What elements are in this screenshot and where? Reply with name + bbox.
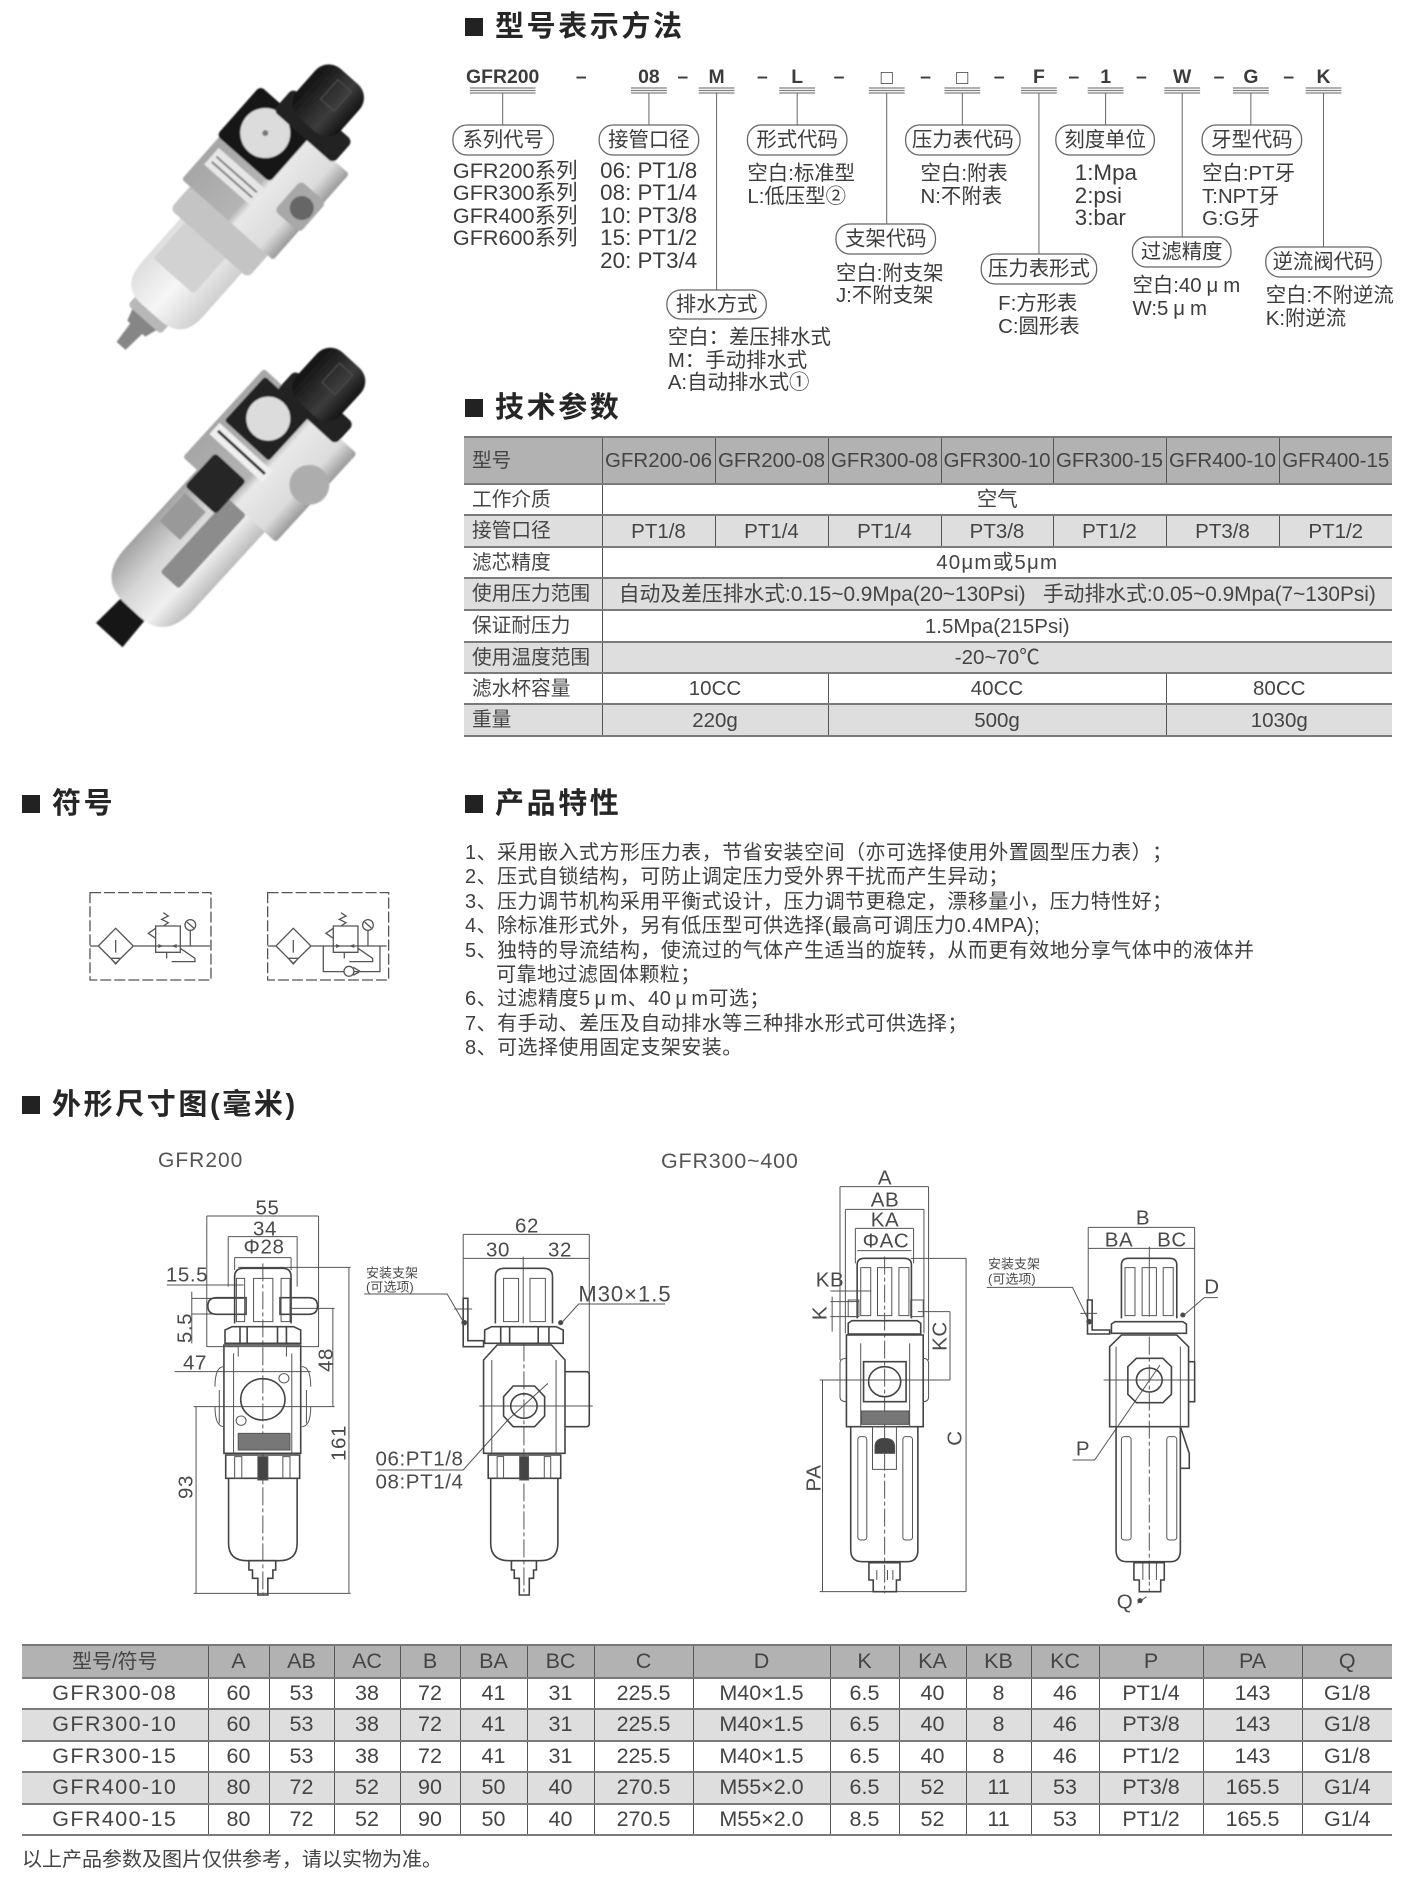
table: technical parameters: PT1/2 [1082, 520, 1137, 543]
dimension drawing: GFR300~400 front: KC [928, 1321, 952, 1351]
table: technical parameters: 1030g [1251, 709, 1308, 732]
table: dimensions: M40×1.5 [719, 1681, 804, 1705]
table: dimensions: AB [287, 1649, 316, 1673]
text block: product features: 2、压式自锁结构，可防止调定压力受外界干扰而产生异动； [465, 866, 1009, 888]
table: dimensions: 53 [1053, 1775, 1077, 1799]
table: dimensions: 53 [290, 1744, 313, 1768]
table: dimensions: 40 [921, 1744, 944, 1768]
dimension drawing: GFR200 side: 06:PT1/8 [376, 1448, 464, 1470]
table: dimensions: 6.5 [850, 1744, 879, 1768]
table: dimensions: P [1144, 1649, 1158, 1673]
item: port size: 15: PT1/2 [600, 225, 697, 250]
item: filtration [1132, 237, 1240, 320]
code letters: □ [956, 67, 968, 89]
table: technical parameters: GFR400-15 [1282, 449, 1389, 472]
table: dimensions: C [636, 1649, 651, 1673]
table: dimensions: 270.5 [617, 1775, 670, 1799]
code letters [466, 66, 1330, 89]
device 2 [61, 321, 405, 680]
code letters: GFR200 [466, 66, 540, 88]
heading: symbols: 符号 [52, 788, 115, 820]
item: form: L:低压型② [747, 185, 846, 208]
item: thread: G:G牙 [1202, 207, 1260, 230]
item: series [453, 125, 578, 250]
item: series: GFR600系列 [453, 225, 578, 250]
item: port size: 10: PT3/8 [600, 203, 697, 228]
item: scale unit: 1:Mpa [1075, 160, 1137, 185]
item: gauge form: C:圆形表 [998, 315, 1080, 338]
item: gauge code: N:不附表 [921, 185, 1002, 208]
code letters: G [1243, 66, 1258, 88]
table: dimensions: PT3/8 [1122, 1712, 1180, 1736]
table: dimensions: 165.5 [1226, 1807, 1279, 1831]
item: scale unit: 2:psi [1075, 183, 1122, 208]
heading: model code: 型号表示方法 [495, 11, 685, 43]
table: dimensions: 52 [921, 1807, 944, 1831]
table: dimensions: 53 [290, 1712, 313, 1736]
table: technical parameters: 使用温度范围 [472, 647, 590, 669]
table: dimensions: 50 [482, 1807, 505, 1831]
heading: symbols [22, 788, 115, 820]
item: filtration: 过滤精度 [1141, 240, 1222, 264]
heading: technical parameters: 技术参数 [495, 392, 621, 424]
dimension drawing: GFR300~400 front: A [878, 1166, 892, 1190]
table: dimensions: 52 [921, 1775, 944, 1799]
table: dimensions: M40×1.5 [719, 1744, 804, 1768]
table: dimensions: 40 [921, 1712, 944, 1736]
item: series: GFR300系列 [453, 180, 578, 205]
dimension drawing: GFR200 side: 32 [548, 1238, 572, 1262]
item: gauge form: F:方形表 [998, 292, 1077, 315]
dimension drawing: GFR200 side: 62 [515, 1214, 539, 1238]
table: dimensions: KA [918, 1649, 947, 1673]
dimension drawing: GFR200 side: M30×1.5 [578, 1282, 672, 1306]
table: technical parameters: 滤芯精度 [472, 552, 551, 574]
table: dimensions: 165.5 [1226, 1775, 1279, 1799]
item: filtration: W:5μm [1132, 297, 1207, 320]
text block: product features: 可靠地过滤固体颗粒； [496, 964, 701, 986]
table: dimensions: 46 [1053, 1681, 1077, 1705]
dimension drawing: GFR300~400 side: BA [1105, 1228, 1133, 1252]
item: form: 形式代码 [756, 128, 838, 152]
table: dimensions: 8.5 [850, 1807, 879, 1831]
code letters: – [1283, 66, 1294, 88]
table: technical parameters: PT1/8 [631, 520, 686, 543]
item: drain: M：手动排水式 [668, 349, 807, 372]
item: scale unit [1056, 125, 1154, 230]
table: dimensions: AC [352, 1649, 382, 1673]
product photo: two filter regulators [95, 63, 366, 648]
dimension drawing: GFR200 front: 5.5 [174, 1313, 196, 1343]
table: dimensions: 31 [549, 1712, 572, 1736]
table: dimensions: 270.5 [617, 1807, 670, 1831]
table: dimensions: 型号/符号 [72, 1650, 158, 1672]
item: form [747, 125, 855, 208]
code letters: F [1033, 66, 1045, 88]
code letters: – [920, 66, 931, 88]
code letters: – [576, 66, 587, 88]
table: dimensions: 80 [227, 1807, 250, 1831]
table: dimensions: GFR300-15 [52, 1744, 177, 1768]
table: dimensions: 40 [921, 1681, 944, 1705]
footnote: 以上产品参数及图片仅供参考，请以实物为准。 [22, 1849, 442, 1871]
table: technical parameters [464, 436, 1392, 737]
item: thread: T:NPT牙 [1202, 185, 1279, 208]
dimension drawing: GFR200 front: 55 [255, 1196, 280, 1220]
table: technical parameters: PT3/8 [1195, 520, 1250, 543]
table: dimensions: 72 [290, 1807, 313, 1831]
text block: product features: 1、采用嵌入式方形压力表，节省安装空间（亦可选择使用外置圆型压力表）； [465, 842, 1173, 864]
dimension drawing: GFR200 side: 30 [486, 1238, 510, 1262]
table: technical parameters: 40CC [971, 677, 1023, 700]
table: dimensions: PT1/2 [1122, 1744, 1180, 1768]
table: technical parameters: 220g [692, 709, 738, 732]
table: technical parameters: 重量 [472, 709, 511, 731]
table: dimensions: G1/4 [1324, 1775, 1371, 1799]
label: GFR200: GFR200 [158, 1149, 243, 1172]
table: dimensions: 41 [482, 1744, 505, 1768]
table: dimensions: 53 [1053, 1807, 1077, 1831]
table: dimensions: 80 [227, 1775, 250, 1799]
item: gauge form: 压力表形式 [988, 257, 1090, 281]
dimension drawing: GFR300~400 side [986, 1206, 1220, 1614]
table: dimensions: KB [984, 1649, 1013, 1673]
item: thread: 空白:PT牙 [1202, 162, 1295, 185]
dimension drawing: GFR300~400 side: P [1076, 1438, 1090, 1460]
table: dimensions: BC [546, 1649, 575, 1673]
dimension drawing: GFR300~400 front: KA [871, 1208, 899, 1232]
item: port size: 接管口径 [608, 128, 690, 152]
item: drain: A:自动排水式① [668, 371, 809, 394]
dimension drawing: GFR200 front: 34 [253, 1218, 277, 1240]
item: bracket: 空白:附支架 [836, 262, 944, 285]
dimension drawing: GFR200 side: 08:PT1/4 [376, 1470, 464, 1494]
item: gauge form [981, 254, 1097, 338]
code letters: – [757, 66, 768, 88]
heading: dimensions: 外形尺寸图(毫米) [52, 1089, 298, 1121]
code letters: 1 [1100, 66, 1111, 88]
item: series: GFR200系列 [453, 158, 578, 183]
item: check valve [1266, 247, 1394, 330]
table: dimensions: GFR400-15 [52, 1807, 177, 1831]
table: technical parameters: 40μm或5μm [936, 551, 1058, 574]
table: dimensions: PT3/8 [1122, 1775, 1180, 1799]
item: filtration: 空白:40μm [1132, 274, 1240, 297]
table: dimensions: 60 [227, 1712, 250, 1736]
table: dimensions: 40 [549, 1775, 572, 1799]
table: dimensions: 52 [355, 1807, 379, 1831]
code letters: – [1136, 66, 1147, 88]
code letters: K [1316, 66, 1330, 88]
table: technical parameters: 工作介质 [472, 489, 551, 511]
dimension drawing: GFR300~400 front [802, 1166, 967, 1594]
table: dimensions: 38 [355, 1744, 379, 1768]
table: dimensions: 72 [418, 1712, 442, 1736]
table: dimensions: 225.5 [617, 1681, 670, 1705]
table: dimensions: 225.5 [617, 1712, 670, 1736]
table: dimensions: G1/8 [1324, 1744, 1371, 1768]
dimension drawing: GFR200 front: Φ28 [244, 1236, 284, 1258]
dimension drawing: GFR200 front: 93 [174, 1475, 198, 1499]
code letters: – [1068, 66, 1079, 88]
code letters: W [1173, 66, 1192, 88]
item: series: 系列代号 [462, 128, 544, 152]
table: dimensions: 8 [993, 1712, 1004, 1736]
table: technical parameters: 自动及差压排水式:0.15~0.9Mpa(20~130Psi) 手动排水式:0.05~0.9Mpa(7~130Psi) [619, 583, 1376, 606]
table: dimensions: 38 [355, 1712, 379, 1736]
dimension drawing: GFR200 front: 161 [328, 1425, 350, 1461]
table: dimensions: B [423, 1649, 437, 1673]
heading: product features: 产品特性 [495, 788, 621, 820]
symbol: with check valve [268, 893, 389, 980]
table: dimensions: 52 [355, 1775, 379, 1799]
table: technical parameters: GFR200-08 [718, 449, 825, 472]
table: technical parameters: GFR300-08 [831, 449, 938, 472]
item: drain: 排水方式 [676, 293, 757, 316]
table: technical parameters: 1.5Mpa(215Psi) [925, 615, 1070, 638]
dimension drawing: GFR300~400 side: D [1204, 1276, 1220, 1298]
table: technical parameters: 型号 [472, 450, 511, 472]
dimension drawing: GFR200 side: 安装支架 [366, 1266, 418, 1280]
symbol diagrams [89, 892, 390, 981]
code letters: – [994, 66, 1005, 88]
table: technical parameters: GFR300-10 [943, 449, 1051, 472]
item: drain [667, 290, 831, 394]
item: thread: 牙型代码 [1211, 128, 1293, 152]
item: scale unit: 3:bar [1075, 205, 1126, 230]
dimension drawing: GFR300~400 front: K [808, 1306, 832, 1320]
table: technical parameters: PT1/4 [857, 520, 912, 543]
text block: product features: 7、有手动、差压及自动排水等三种排水形式可供选择； [465, 1013, 968, 1035]
dimension drawing: GFR300~400 side: Q [1117, 1590, 1133, 1614]
table: dimensions: M55×2.0 [719, 1775, 804, 1799]
table: dimensions: M55×2.0 [719, 1807, 804, 1831]
table: dimensions: Q [1339, 1649, 1356, 1673]
table: dimensions: D [754, 1649, 769, 1673]
item: bracket: J:不附支架 [836, 284, 933, 307]
table: dimensions: 11 [987, 1807, 1010, 1831]
table: technical parameters: PT1/2 [1308, 520, 1363, 543]
table: dimensions: M40×1.5 [719, 1712, 804, 1736]
table: dimensions: 90 [418, 1775, 442, 1799]
dimension drawing: GFR300~400 front: KB [816, 1268, 844, 1292]
table: dimensions: K [857, 1649, 872, 1673]
dimension drawing: GFR300~400 front: C [944, 1430, 966, 1446]
dimension drawing: GFR200 front: 47 [183, 1352, 207, 1374]
table: technical parameters: 500g [974, 709, 1020, 732]
table: dimensions: 72 [290, 1775, 313, 1799]
table: dimensions: 90 [418, 1807, 442, 1831]
table: technical parameters: GFR200-06 [605, 449, 712, 472]
text block: product features: 8、可选择使用固定支架安装。 [465, 1037, 743, 1059]
table: technical parameters: -20~70℃ [955, 646, 1040, 669]
dimension drawing: GFR200 side [364, 1214, 672, 1596]
item: port size: 06: PT1/8 [600, 158, 697, 183]
table: dimensions: 143 [1235, 1744, 1270, 1768]
code letters: – [1214, 66, 1225, 88]
item: port size [599, 125, 699, 273]
code letters: – [834, 66, 845, 88]
table: technical parameters: 10CC [689, 677, 741, 700]
table: dimensions: G1/8 [1324, 1681, 1371, 1705]
table: dimensions [22, 1644, 1392, 1836]
table: dimensions: 6.5 [850, 1712, 879, 1736]
table: technical parameters: PT1/4 [744, 520, 799, 543]
table: technical parameters: 接管口径 [472, 520, 551, 542]
table: dimensions: 72 [418, 1744, 442, 1768]
table: dimensions: 41 [482, 1712, 505, 1736]
table: dimensions: PT1/4 [1122, 1681, 1180, 1705]
table: technical parameters: 保证耐压力 [472, 615, 570, 637]
table: dimensions: PT1/2 [1122, 1807, 1180, 1831]
table: dimensions: 72 [418, 1681, 442, 1705]
item: bracket: 支架代码 [845, 227, 926, 251]
item: gauge code: 空白:附表 [921, 162, 1008, 185]
text block: product features: 5、独特的导流结构，使流过的气体产生适当的旋转，从而更有效地分享气体中的液体并 [465, 940, 1254, 962]
table: dimensions: 53 [290, 1681, 313, 1705]
table: technical parameters: GFR400-10 [1169, 449, 1276, 472]
code letters: L [791, 66, 803, 88]
dimension drawing: GFR200 front: 48 [314, 1348, 338, 1372]
table: dimensions: G1/8 [1324, 1712, 1371, 1736]
table: dimensions: 60 [227, 1744, 250, 1768]
code letters: M [709, 66, 725, 88]
table: dimensions: 11 [987, 1775, 1010, 1799]
text block: product features: 3、压力调节机构采用平衡式设计，压力调节更稳定，漂移量小，压力特性好； [465, 891, 1173, 913]
code letters: □ [881, 67, 893, 89]
table: dimensions: 225.5 [617, 1744, 670, 1768]
item: port size: 08: PT1/4 [600, 180, 697, 205]
table: dimensions: 8 [993, 1744, 1004, 1768]
table: technical parameters: 使用压力范围 [472, 583, 590, 605]
item: gauge code: 压力表代码 [912, 128, 1014, 152]
table: technical parameters: 80CC [1253, 677, 1305, 700]
table: dimensions: 46 [1053, 1712, 1077, 1736]
dimension drawing: GFR200 front: 15.5 [166, 1264, 208, 1286]
table: dimensions: 41 [482, 1681, 505, 1705]
code letters: 08 [638, 66, 660, 88]
item: port size: 20: PT3/4 [600, 248, 697, 273]
table: dimensions: PA [1239, 1649, 1266, 1673]
item: form: 空白:标准型 [747, 162, 855, 185]
dimension drawing: GFR300~400 front: ΦAC [863, 1230, 909, 1252]
table: dimensions: 60 [227, 1681, 250, 1705]
table: dimensions: 31 [549, 1744, 572, 1768]
code letters: – [677, 66, 688, 88]
dimension drawing: GFR300~400 side: BC [1157, 1228, 1187, 1252]
item: series: GFR400系列 [453, 203, 578, 228]
item: gauge code [906, 125, 1020, 208]
table: dimensions: 6.5 [850, 1681, 879, 1705]
dimension drawing: GFR300~400 side: 安装支架 [988, 1256, 1040, 1272]
table: dimensions: 143 [1235, 1712, 1270, 1736]
table: dimensions: 46 [1053, 1744, 1077, 1768]
item: check valve: K:附逆流 [1266, 307, 1346, 330]
dimension drawing: GFR300~400 front: AB [871, 1188, 899, 1212]
table: technical parameters: 空气 [977, 488, 1018, 511]
symbol: without check valve [90, 893, 211, 980]
item: bracket [836, 224, 944, 307]
item: drain: 空白：差压排水式 [668, 326, 831, 349]
table: technical parameters: GFR300-15 [1056, 449, 1163, 472]
dimension drawing: GFR300~400 front: PA [802, 1464, 826, 1492]
label: GFR300~400: GFR300~400 [661, 1149, 799, 1173]
table: dimensions: KC [1050, 1649, 1080, 1673]
table: dimensions: GFR300-08 [52, 1681, 177, 1705]
dimension drawing: GFR200 side: (可选项) [366, 1280, 414, 1294]
table: technical parameters: 滤水杯容量 [472, 678, 570, 700]
table: dimensions: 143 [1235, 1681, 1270, 1705]
table: dimensions: GFR400-10 [52, 1775, 177, 1799]
table: dimensions: BA [479, 1649, 508, 1673]
text block: product features: 6、过滤精度5μm、40μm可选； [465, 988, 770, 1010]
model code breakdown diagram [452, 66, 1394, 394]
table: technical parameters: PT3/8 [970, 520, 1024, 543]
table: dimensions: 6.5 [850, 1775, 879, 1799]
item: check valve: 空白:不附逆流 [1266, 284, 1394, 307]
dimension drawing: GFR300~400 side: (可选项) [988, 1272, 1036, 1286]
table: dimensions: 8 [993, 1681, 1004, 1705]
item: check valve: 逆流阀代码 [1273, 250, 1374, 274]
table: dimensions: G1/4 [1324, 1807, 1371, 1831]
dimension drawing: GFR200 front [166, 1196, 351, 1596]
dimension drawing: GFR300~400 side: B [1136, 1206, 1150, 1230]
table: dimensions: 31 [549, 1681, 572, 1705]
table: dimensions: 40 [549, 1807, 572, 1831]
device 1 [70, 36, 399, 385]
text block: product features [465, 842, 1254, 1059]
table: dimensions: 38 [355, 1681, 379, 1705]
item: thread [1202, 125, 1302, 230]
item: scale unit: 刻度单位 [1064, 128, 1146, 152]
table: dimensions: A [231, 1649, 246, 1673]
table: dimensions: GFR300-10 [52, 1712, 177, 1736]
table: dimensions: 50 [482, 1775, 505, 1799]
text block: product features: 4、除标准形式外，另有低压型可供选择(最高可调压力0.4MPA); [465, 915, 1040, 937]
